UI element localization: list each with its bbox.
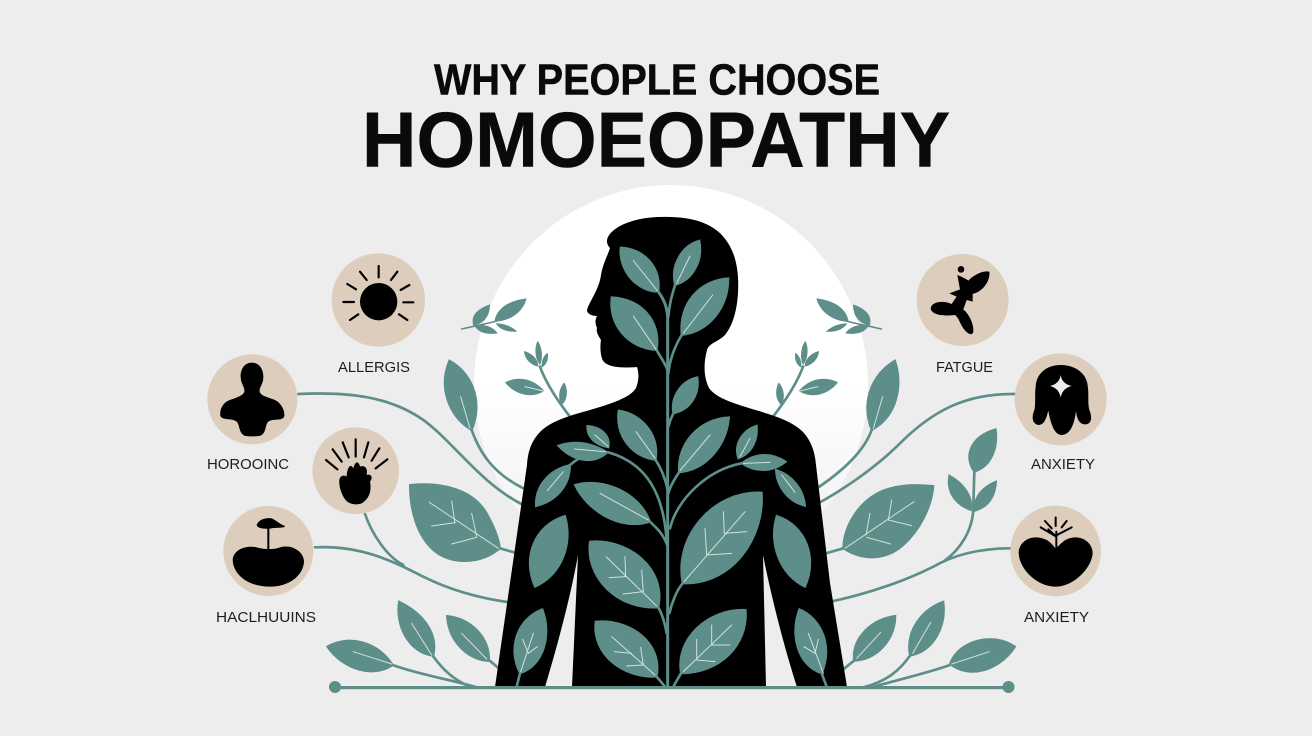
icon: fatigue figure	[917, 254, 1009, 346]
title: WHY PEOPLE CHOOSE	[434, 56, 880, 104]
left plant branches and leaves	[298, 361, 523, 604]
leaf veins	[521, 256, 823, 675]
leafy plant inside figure	[514, 241, 827, 687]
icon: horooinc bust	[207, 354, 297, 444]
icon: hachluuins mushroom bowl	[223, 506, 313, 596]
icon: anxiety head with star	[1015, 353, 1107, 445]
stems	[517, 285, 827, 687]
label: allergis: ALLERGIS	[338, 359, 410, 376]
white glow arch behind figure	[474, 185, 868, 585]
label: horooinc: HOROOINC	[207, 456, 289, 473]
right sprigs	[773, 298, 881, 417]
left sprigs	[462, 298, 570, 417]
icon: anxiety heart with sprout	[1010, 506, 1101, 596]
label: anxiety upper: ANXIETY	[1031, 456, 1095, 473]
title: HOMOEOPATHY	[362, 96, 950, 184]
ground line	[329, 681, 1014, 693]
bottom-right leaves	[843, 602, 1015, 687]
leaves	[514, 241, 826, 677]
icon: hand with rays	[312, 427, 399, 514]
icon: allergis sun	[332, 253, 425, 347]
label: anxiety lower: ANXIETY	[1024, 609, 1089, 626]
label: hachluuins: HACLHUUINS	[216, 609, 316, 626]
title	[362, 56, 950, 184]
human silhouette	[495, 217, 847, 687]
right plant branches and leaves	[813, 361, 1015, 603]
bottom-left leaves	[327, 602, 500, 687]
label: fatigue: FATGUE	[936, 359, 993, 376]
